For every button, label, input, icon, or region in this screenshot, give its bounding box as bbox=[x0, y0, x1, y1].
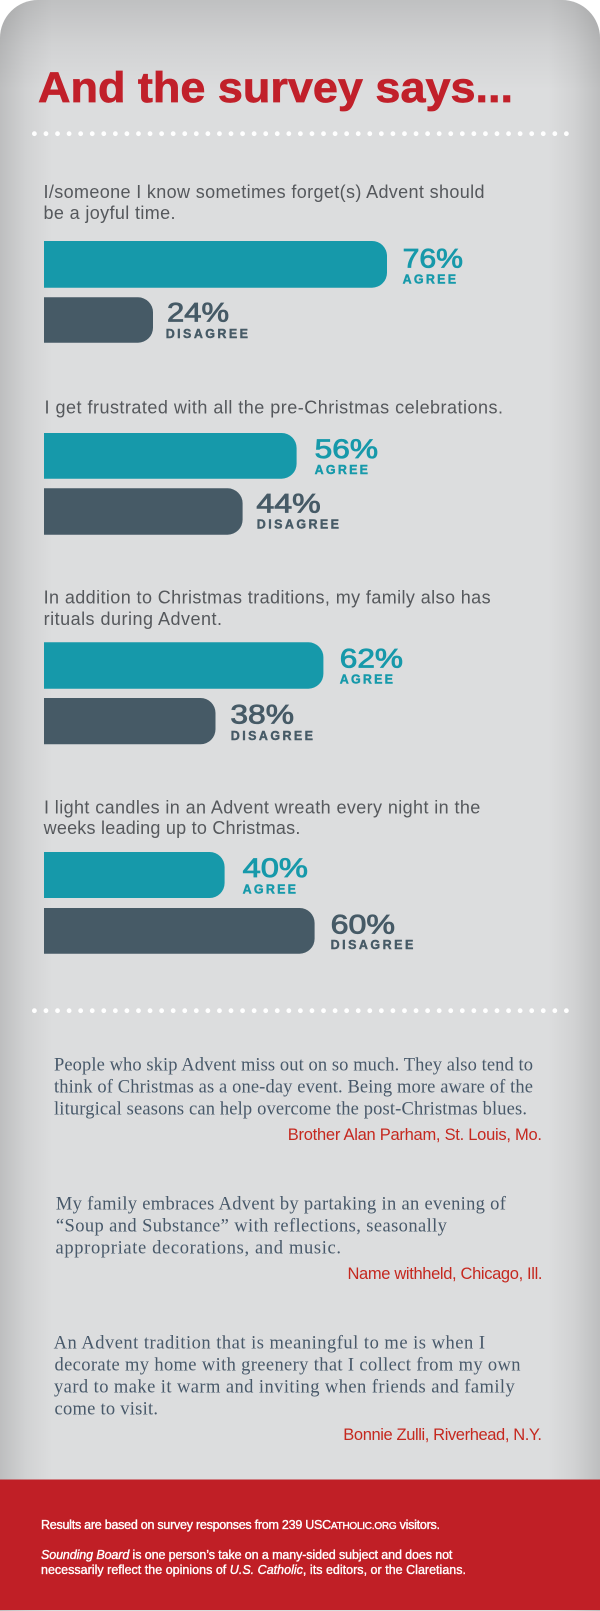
label: 44% disagree: DISAGREE bbox=[257, 518, 339, 532]
quote 3 bbox=[54, 1333, 542, 1444]
bar: 38% disagree bbox=[44, 698, 216, 744]
label: 44% disagree bbox=[256, 488, 339, 532]
label: 40% agree bbox=[243, 853, 308, 896]
label: 56% agree bbox=[315, 434, 378, 477]
label: 76% agree: AGREE bbox=[403, 273, 456, 287]
quote 2: appropriate decorations, and music. bbox=[56, 1238, 341, 1258]
label: 56% agree: AGREE bbox=[315, 463, 368, 477]
label: 38% disagree bbox=[230, 700, 313, 743]
label: 38% disagree: DISAGREE bbox=[231, 729, 313, 743]
label: 44% disagree: 44% bbox=[256, 488, 321, 518]
quote 1: liturgical seasons can help overcome the post-Christmas blues. bbox=[54, 1099, 527, 1119]
label: 60% disagree bbox=[331, 910, 413, 952]
footer: disclaimer: Sounding Board is one person’s take on a many-sided subject and does not bbox=[41, 1548, 453, 1562]
question 4 text bbox=[43, 797, 480, 838]
label: 62% agree: AGREE bbox=[340, 672, 393, 686]
bar: 44% disagree bbox=[44, 488, 243, 535]
quote 1: think of Christmas as a one-day event. Being more aware of the bbox=[54, 1077, 533, 1097]
quote 2 bbox=[56, 1194, 542, 1283]
question 3 text: In addition to Christmas traditions, my family also has bbox=[44, 587, 491, 607]
label: 60% disagree: DISAGREE bbox=[331, 938, 413, 952]
label: 40% agree: AGREE bbox=[243, 882, 296, 896]
bar: 40% agree bbox=[44, 852, 225, 898]
label: 24% disagree: DISAGREE bbox=[166, 327, 248, 341]
question 4 text: weeks leading up to Christmas. bbox=[43, 818, 300, 838]
bar: 56% agree bbox=[44, 433, 297, 479]
panel: survey question 1 bbox=[44, 182, 484, 343]
attribution 2: Name withheld, Chicago, Ill. bbox=[348, 1265, 542, 1283]
quote 2: My family embraces Advent by partaking in an evening of bbox=[56, 1194, 507, 1214]
bar: 24% disagree bbox=[44, 297, 153, 343]
attribution 3: Bonnie Zulli, Riverhead, N.Y. bbox=[343, 1426, 542, 1444]
bar: 62% agree bbox=[44, 642, 323, 689]
quote 3: An Advent tradition that is meaningful to me is when I bbox=[54, 1333, 485, 1353]
label: 76% agree: 76% bbox=[403, 244, 463, 274]
bar: 76% agree bbox=[44, 241, 387, 288]
label: 40% agree: 40% bbox=[243, 853, 308, 883]
question 1 text bbox=[44, 182, 484, 223]
label: 56% agree: 56% bbox=[315, 434, 378, 464]
quote 3: decorate my home with greenery that I collect from my own bbox=[54, 1355, 520, 1375]
footer: survey note: Results are based on survey responses from 239 USCATHOLIC.ORG visitors. bbox=[41, 1518, 440, 1532]
label: 24% disagree: 24% bbox=[167, 298, 229, 328]
bar: 60% disagree bbox=[44, 908, 315, 954]
footer: disclaimer bbox=[41, 1548, 466, 1577]
quote 1: People who skip Advent miss out on so much. They also tend to bbox=[54, 1056, 533, 1076]
question 4 text: I light candles in an Advent wreath every night in the bbox=[44, 797, 480, 817]
question 2 text: I get frustrated with all the pre-Christmas celebrations. bbox=[44, 397, 503, 417]
panel: red footer bbox=[0, 1480, 600, 1610]
label: 38% disagree: 38% bbox=[230, 700, 294, 730]
panel: survey question 2 bbox=[44, 397, 503, 535]
label: 76% agree bbox=[403, 244, 463, 287]
question 1 text: I/someone I know sometimes forget(s) Advent should bbox=[44, 182, 484, 202]
label: 60% disagree: 60% bbox=[331, 910, 395, 940]
footer: disclaimer: necessarily reflect the opinions of U.S. Catholic, its editors, or the Claretians. bbox=[41, 1563, 466, 1577]
panel: survey question 3 bbox=[44, 587, 491, 744]
question 3 text bbox=[44, 587, 491, 629]
panel: survey question 4 bbox=[43, 797, 480, 954]
label: 62% agree bbox=[340, 644, 403, 686]
label: 24% disagree bbox=[166, 298, 248, 341]
quote 3: come to visit. bbox=[54, 1399, 158, 1419]
question 3 text: rituals during Advent. bbox=[44, 609, 222, 629]
label: 62% agree: 62% bbox=[340, 644, 403, 674]
quote 3: yard to make it warm and inviting when friends and family bbox=[54, 1377, 515, 1397]
quote 2: “Soup and Substance” with reflections, seasonally bbox=[56, 1216, 448, 1236]
title: And the survey says... bbox=[38, 64, 513, 112]
attribution 1: Brother Alan Parham, St. Louis, Mo. bbox=[288, 1126, 542, 1144]
question 1 text: be a joyful time. bbox=[44, 203, 176, 223]
quote 1 bbox=[54, 1056, 542, 1144]
